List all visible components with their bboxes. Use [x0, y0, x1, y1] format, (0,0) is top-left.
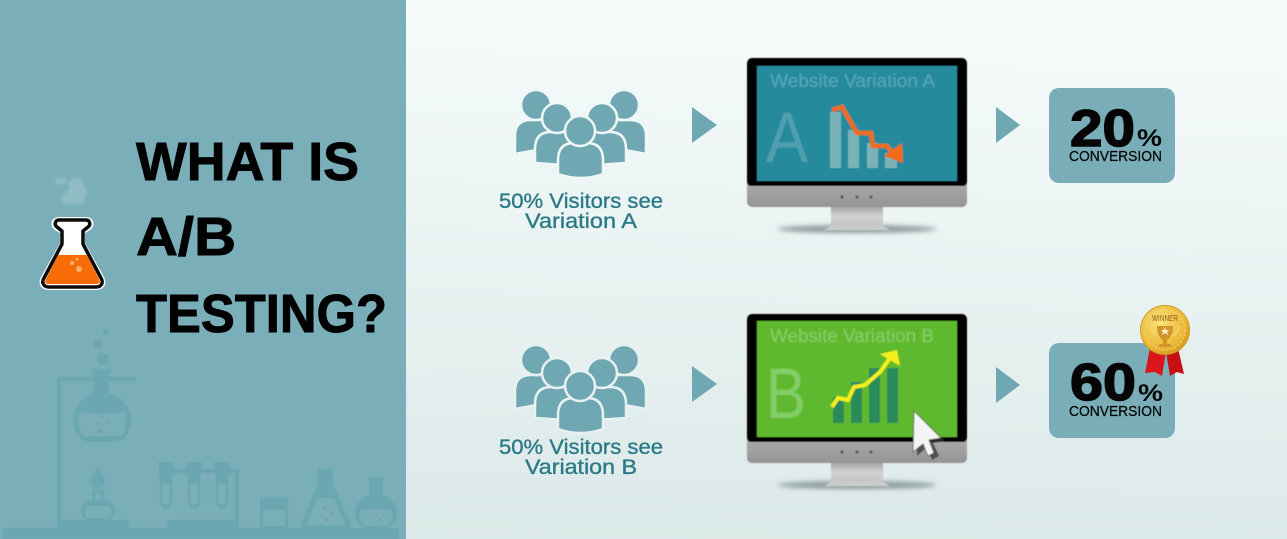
- arrow B1: [692, 366, 717, 402]
- conversion box A: CONVERSION: [1069, 148, 1162, 165]
- conversion box A: 20: [1070, 100, 1135, 158]
- row A: visitors group: [515, 90, 646, 178]
- row B: visitors label: 50% Visitors see: [499, 436, 663, 459]
- arrow A1: [692, 107, 717, 143]
- monitor A: Website Variation A: [770, 71, 935, 91]
- conversion box B: CONVERSION: [1069, 403, 1162, 420]
- icon: winner medal: WINNER: [1152, 314, 1178, 323]
- arrow A2: [996, 107, 1020, 143]
- icon: smoke: [55, 178, 86, 205]
- conversion box B: [1049, 343, 1175, 438]
- monitor B: B: [766, 355, 806, 434]
- icon: mouse cursor: [913, 411, 945, 460]
- conversion box B: %: [1138, 380, 1163, 407]
- conversion box B: 60: [1070, 354, 1136, 412]
- title: A/B: [136, 207, 236, 267]
- row A: visitors label: Variation A: [525, 210, 637, 233]
- icon: orange flask: [40, 217, 105, 290]
- row B: visitors label: [499, 436, 663, 479]
- panel: left teal: [0, 0, 406, 539]
- icon: winner medal: [1140, 306, 1190, 376]
- row A: visitors label: [499, 190, 663, 233]
- monitor A: A: [766, 99, 809, 178]
- monitor A: [747, 58, 967, 233]
- row A: visitors label: 50% Visitors see: [499, 190, 663, 213]
- title: [136, 132, 387, 344]
- conversion box A: %: [1137, 125, 1162, 152]
- background: [405, 0, 1287, 539]
- title: WHAT IS: [136, 132, 359, 192]
- monitor B: [747, 314, 967, 489]
- conversion box A: [1049, 88, 1175, 183]
- row B: visitors group: [515, 345, 646, 433]
- row B: visitors label: Variation B: [525, 456, 637, 479]
- monitor B: Website Variation B: [770, 326, 934, 346]
- arrow B2: [996, 367, 1020, 403]
- lab equipment silhouette: [2, 329, 399, 539]
- title: TESTING?: [136, 284, 387, 344]
